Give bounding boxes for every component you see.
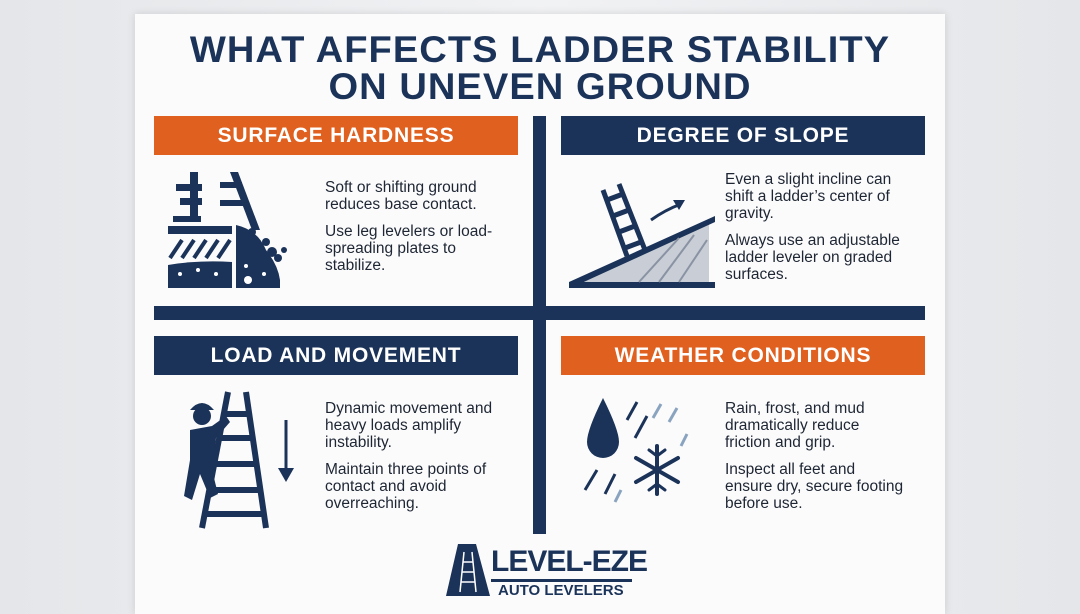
text: load and movement — [325, 400, 492, 512]
panel: load and movement — [154, 336, 518, 529]
text: weather conditions — [725, 400, 903, 512]
icon: ground with ladder — [168, 172, 287, 288]
heading: degree of slope: DEGREE OF SLOPE — [637, 124, 849, 147]
icon: drop, rain, snowflake — [584, 398, 688, 503]
text: weather conditions: Inspect all feet and ensure dry, secure footing before use. — [725, 461, 903, 512]
title: WHAT AFFECTS LADDER STABILITY — [190, 29, 890, 70]
panel: surface hardness — [154, 116, 518, 288]
text: weather conditions: Rain, frost, and mud dramatically reduce friction and grip. — [725, 400, 865, 451]
text: load and movement: Dynamic movement and heavy loads amplify instability. — [325, 400, 492, 451]
vertical divider — [533, 116, 546, 534]
text: degree of slope: Even a slight incline can shift a ladder’s center of gravity. — [725, 171, 891, 222]
heading: weather conditions — [561, 336, 925, 375]
heading: surface hardness: SURFACE HARDNESS — [218, 124, 454, 147]
icon: worker on ladder — [184, 391, 294, 529]
horizontal divider — [154, 306, 925, 320]
heading: surface hardness — [154, 116, 518, 155]
heading: load and movement: LOAD AND MOVEMENT — [211, 344, 461, 367]
panel: weather conditions — [561, 336, 925, 512]
text: surface hardness — [325, 179, 492, 274]
icon: logo ladder — [446, 544, 490, 596]
title — [190, 29, 890, 107]
text: degree of slope — [725, 171, 900, 283]
text: surface hardness: Use leg levelers or load-spreading plates to stabilize. — [325, 223, 492, 274]
panel: degree of slope — [561, 116, 925, 288]
text: degree of slope: Always use an adjustable ladder leveler on graded surfaces. — [725, 232, 900, 283]
icon: slope with ladder — [569, 183, 715, 288]
heading: degree of slope — [561, 116, 925, 155]
heading: load and movement — [154, 336, 518, 375]
logo: Level-Eze Auto Levelers: AUTO LEVELERS — [498, 582, 624, 599]
heading: weather conditions: WEATHER CONDITIONS — [615, 344, 871, 367]
text: load and movement: Maintain three points of contact and avoid overreaching. — [325, 461, 486, 512]
text: surface hardness: Soft or shifting ground reduces base contact. — [325, 179, 477, 213]
title: ON UNEVEN GROUND — [328, 66, 752, 107]
logo text: LEVEL-EZE — [491, 545, 647, 578]
logo: Level-Eze Auto Levelers — [446, 544, 647, 599]
